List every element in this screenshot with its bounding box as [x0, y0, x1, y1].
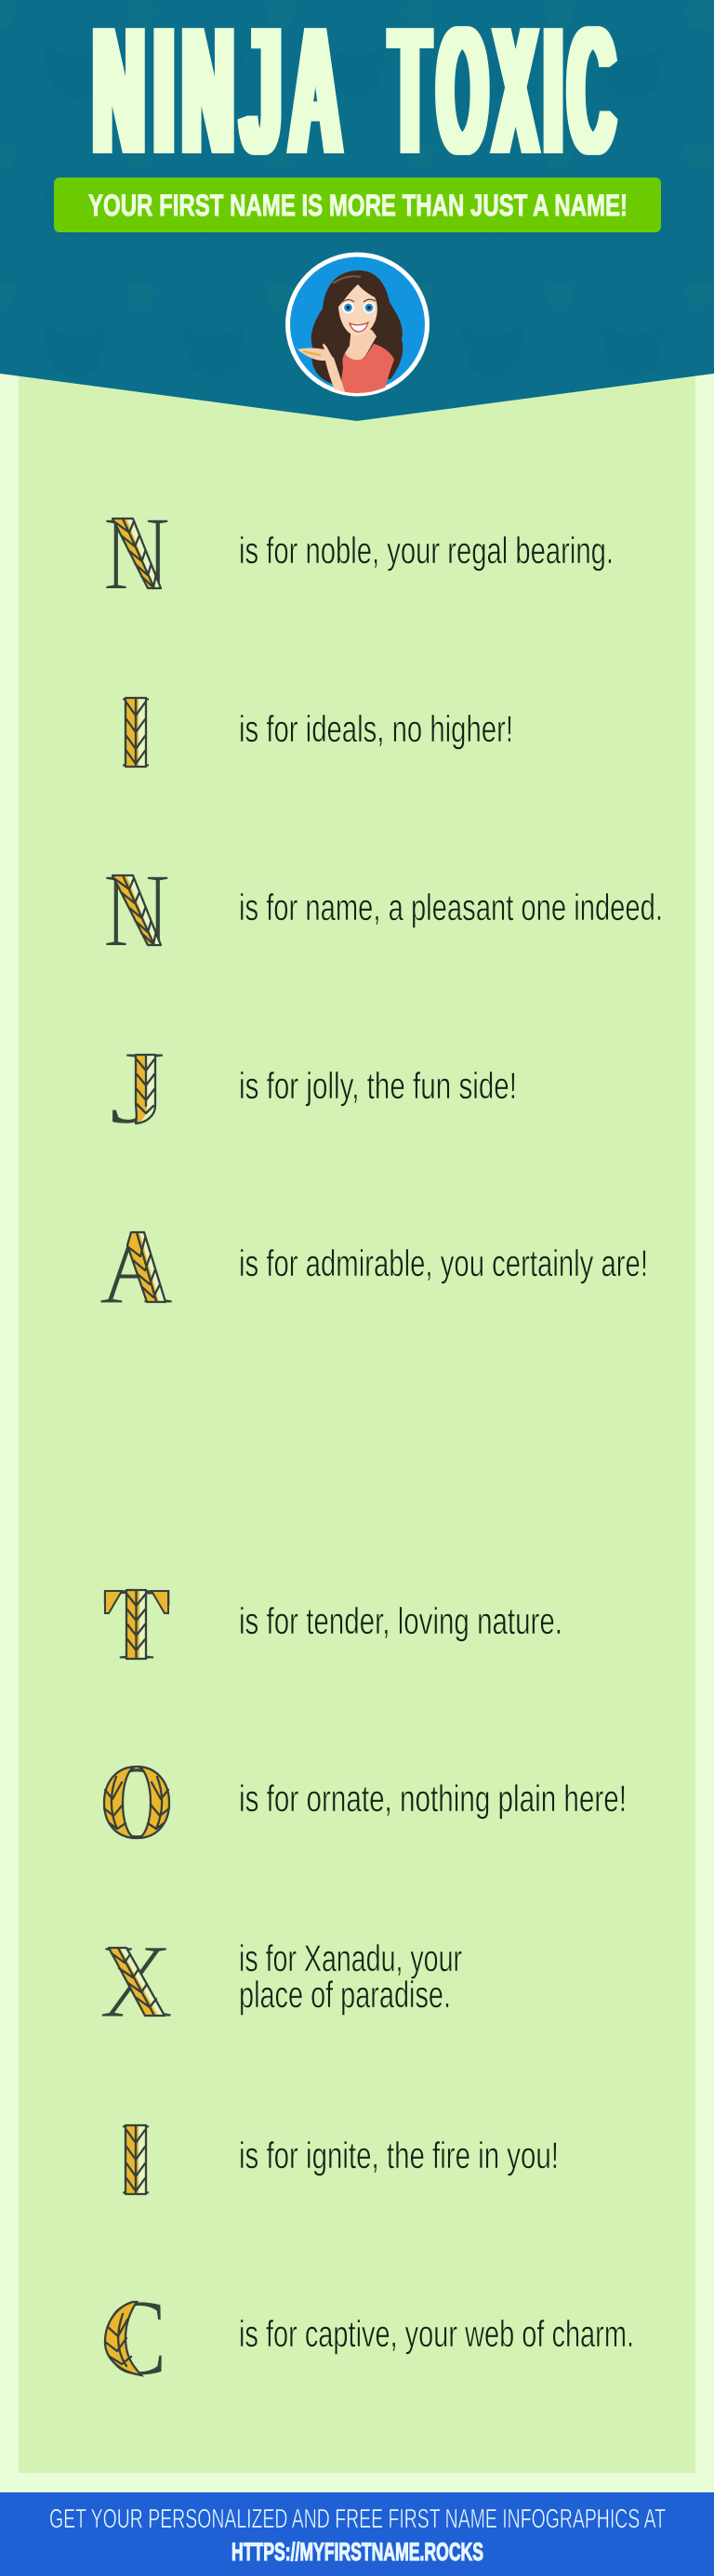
row: N name	[103, 853, 663, 968]
letter icon: I: I	[119, 2101, 152, 2217]
footer text: HTTPS://MYFIRSTNAME.ROCKS	[231, 2538, 483, 2566]
row: I ignite	[119, 2101, 559, 2217]
letter icon: T: T	[101, 1566, 172, 1682]
letter icon: C: C	[102, 2277, 167, 2399]
row: C captive	[102, 2277, 634, 2399]
letter icon: A: A	[99, 1210, 173, 1326]
row: O ornate	[100, 1745, 627, 1861]
text: X lines: is for Xanadu, your	[239, 1939, 462, 1979]
row: A admirable	[99, 1210, 648, 1326]
footer text	[49, 2504, 666, 2566]
subtitle banner	[54, 177, 661, 232]
row: N noble	[103, 496, 614, 611]
icon: woman avatar	[288, 255, 428, 395]
footer	[0, 2492, 714, 2576]
letter icon: I: I	[119, 674, 152, 790]
text: I line: is for ideals, no higher!	[239, 709, 513, 750]
row: T tender	[101, 1566, 562, 1682]
row: X Xanadu	[99, 1924, 472, 2040]
letter icon: X: X	[99, 1924, 173, 2040]
text: I line: is for ignite, the fire in you!	[239, 2136, 559, 2176]
title	[93, 0, 615, 193]
letter icon: O: O	[100, 1745, 173, 1861]
panel: header	[0, 0, 714, 421]
letter icon: N: N	[103, 496, 170, 611]
text: J line: is for jolly, the fun side!	[239, 1066, 517, 1107]
row: J jolly	[109, 1030, 517, 1146]
panel: letter list background	[19, 353, 695, 2473]
letter icon: N: N	[103, 853, 170, 968]
letter icon: J: J	[109, 1030, 166, 1146]
row: I ideals	[119, 674, 513, 790]
text: T line: is for tender, loving nature.	[239, 1601, 562, 1642]
text: X lines: place of paradise.	[239, 1975, 451, 2016]
